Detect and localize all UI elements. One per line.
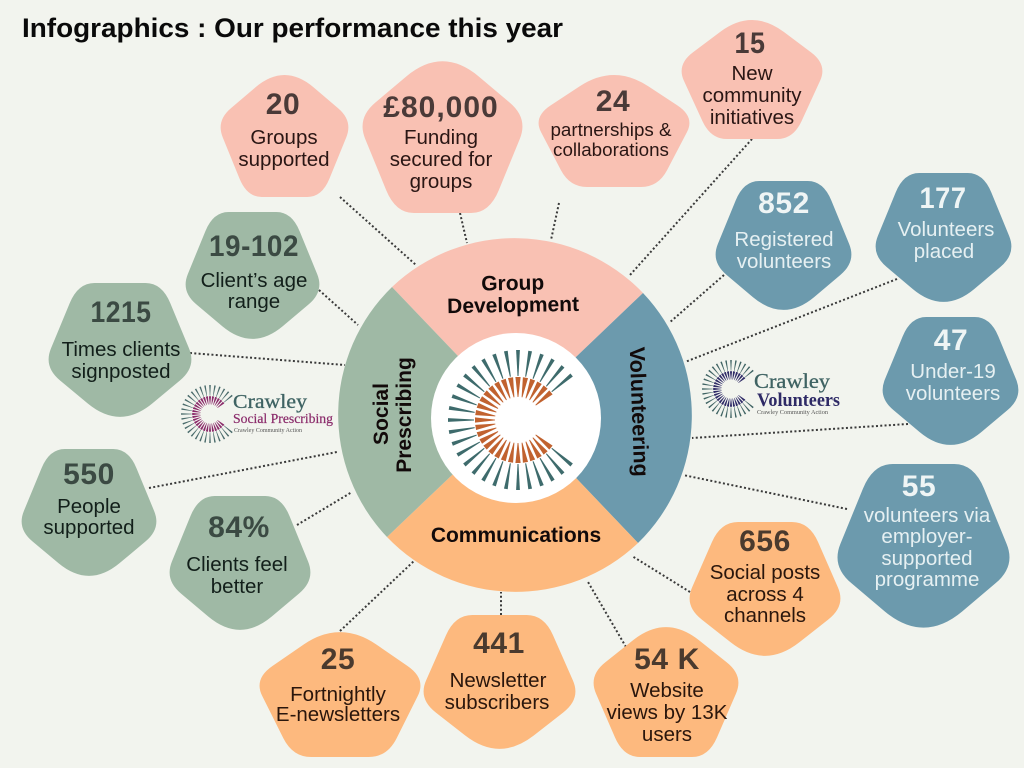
stat: 1215 Times clients signposted: signposted	[71, 360, 171, 383]
stat: 54 K Website views: users	[642, 723, 692, 746]
stat: 24 partnerships: partnerships &	[550, 119, 672, 140]
logo: Crawley Social Prescribing: Crawley Community Action	[234, 428, 302, 434]
segment: Communications	[387, 416, 638, 592]
stat: 84% Clients feel better: Clients feel	[186, 553, 288, 576]
stat: 656 Social posts: Social posts	[710, 561, 820, 584]
stat: 84% Clients feel better: 84%	[208, 511, 270, 544]
stat: 24 partnerships	[539, 75, 689, 187]
logo: Crawley Social Prescribing: Crawley	[233, 391, 307, 413]
stat: 1215 Times clients signposted: 1215	[90, 296, 152, 329]
stat: 47 Under-19 volunteers	[883, 317, 1018, 445]
stat: 84% Clients feel better: better	[211, 575, 263, 598]
segment: Volunteering	[516, 293, 692, 543]
stat: 25 Fortnightly E-newsletters: 25	[321, 643, 355, 676]
stat: 15 New community initiatives	[682, 20, 822, 139]
stat: 25 Fortnightly E-newsletters	[260, 632, 420, 757]
stat: 441 Newsletter subscribers: subscribers	[445, 691, 549, 714]
stat: £80,000 Funding: Funding	[404, 126, 478, 149]
stat: £80,000 Funding	[363, 61, 522, 213]
stat: 656 Social posts: 656	[739, 525, 791, 558]
stat: 55 volunteers via employer-supported programme: volunteers via	[864, 504, 991, 527]
stat: 25 Fortnightly E-newsletters: E-newsletters	[276, 703, 400, 726]
stat: 550 People supported: 550	[63, 458, 115, 491]
stat: 19-102 Client's age range: Client’s age	[201, 269, 307, 292]
stat: 24 partnerships: 24	[596, 85, 630, 118]
heading: Group Development: Development	[447, 293, 579, 318]
stat: 656 Social posts	[690, 522, 840, 656]
heading: Social Prescribing	[370, 357, 416, 473]
stat: 47 Under-19 volunteers: 47	[934, 324, 968, 357]
stat: 54 K Website views: Website	[630, 679, 704, 702]
stat: 54 K Website views: 54 K	[634, 643, 700, 676]
stat: 441 Newsletter subscribers: 441	[473, 627, 525, 660]
stat: 55 volunteers via employer-supported programme	[838, 464, 1009, 628]
stat: 1215 Times clients signposted: Times clients	[62, 338, 180, 361]
stat: 15 New community initiatives: New	[731, 62, 773, 85]
stat: 15 New community initiatives: community	[702, 84, 802, 107]
stat: 852 Registered volunteers: volunteers	[737, 250, 831, 273]
stat: 852 Registered volunteers: 852	[758, 187, 810, 220]
stat: 177 Volunteers placed: Volunteers	[898, 218, 994, 241]
stat: 84% Clients feel better	[170, 496, 310, 630]
stat: 20 Groups supported: Groups	[250, 126, 318, 149]
stat: 19-102 Client's age range	[186, 212, 319, 339]
logo: Crawley Volunteers: Crawley	[754, 369, 831, 393]
stat: 20 Groups supported: supported	[238, 148, 330, 171]
stat: 20 Groups supported: 20	[266, 88, 300, 121]
heading: Communications: Communications	[431, 524, 601, 547]
stat: 55 volunteers via employer-supported programme: 55	[902, 470, 936, 503]
stat: 177 Volunteers placed	[876, 173, 1011, 302]
stat: £80,000 Funding: £80,000	[383, 91, 499, 124]
stat: 19-102 Client's age range: 19-102	[209, 230, 299, 263]
stat: 550 People supported: People	[57, 495, 121, 518]
heading: Group Development: Group	[481, 271, 544, 296]
stat: 55 volunteers via employer-supported programme: employer-	[881, 525, 973, 548]
stat: £80,000 Funding: secured for	[390, 148, 492, 171]
stat: 15 New community initiatives: 15	[734, 27, 766, 60]
stat: 55 volunteers via employer-supported programme: supported	[881, 547, 973, 570]
central white disc	[431, 333, 601, 503]
logo: Crawley Social Prescribing	[181, 385, 333, 443]
stat: 177 Volunteers placed: placed	[914, 240, 974, 263]
stat: 852 Registered volunteers: Registered	[734, 228, 834, 251]
stat: 177 Volunteers placed: 177	[920, 182, 966, 215]
stat: 47 Under-19 volunteers: volunteers	[906, 382, 1000, 405]
stat: 852 Registered volunteers	[716, 181, 851, 310]
stat: 656 Social posts: across 4	[726, 583, 804, 606]
segment: Group Development	[392, 238, 643, 416]
segment: Social Prescribing	[338, 287, 516, 537]
central wheel	[338, 238, 692, 592]
logo: Crawley Volunteers: Volunteers	[757, 390, 840, 411]
stat: 656 Social posts: channels	[724, 604, 806, 627]
stat: 55 volunteers via employer-supported programme: programme	[875, 568, 979, 591]
stat: 54 K Website views	[594, 627, 738, 757]
logo: Crawley Volunteers	[702, 360, 840, 418]
stat: 15 New community initiatives: initiatives	[710, 106, 794, 129]
heading: Social Prescribing: Social	[370, 383, 393, 445]
stat: 19-102 Client's age range: range	[228, 290, 280, 313]
stat: 24 partnerships: collaborations	[553, 139, 669, 160]
stat: 54 K Website views: views by 13K	[607, 701, 728, 724]
stat: 550 People supported: supported	[43, 516, 135, 539]
stat: £80,000 Funding: groups	[410, 170, 472, 193]
title: Infographics : Our performance this year	[22, 13, 563, 43]
stat: 441 Newsletter subscribers: Newsletter	[450, 669, 547, 692]
heading: Social Prescribing: Prescribing	[393, 357, 416, 473]
stat: 20 Groups supported	[221, 75, 348, 197]
stat: 25 Fortnightly E-newsletters: Fortnightly	[290, 683, 387, 706]
logo: Crawley Volunteers: Crawley Community Action	[757, 410, 828, 416]
central logo: sunburst C	[448, 350, 573, 490]
stat: 441 Newsletter subscribers	[424, 615, 575, 749]
heading: Volunteering: Volunteering	[625, 346, 653, 477]
heading: Group Development	[447, 271, 579, 318]
stat: 1215 Times clients signposted	[49, 283, 191, 417]
logo: Crawley Social Prescribing: Social Prescribing	[233, 411, 333, 426]
stat: 550 People supported	[22, 449, 156, 576]
stat: 47 Under-19 volunteers: Under-19	[910, 360, 996, 383]
